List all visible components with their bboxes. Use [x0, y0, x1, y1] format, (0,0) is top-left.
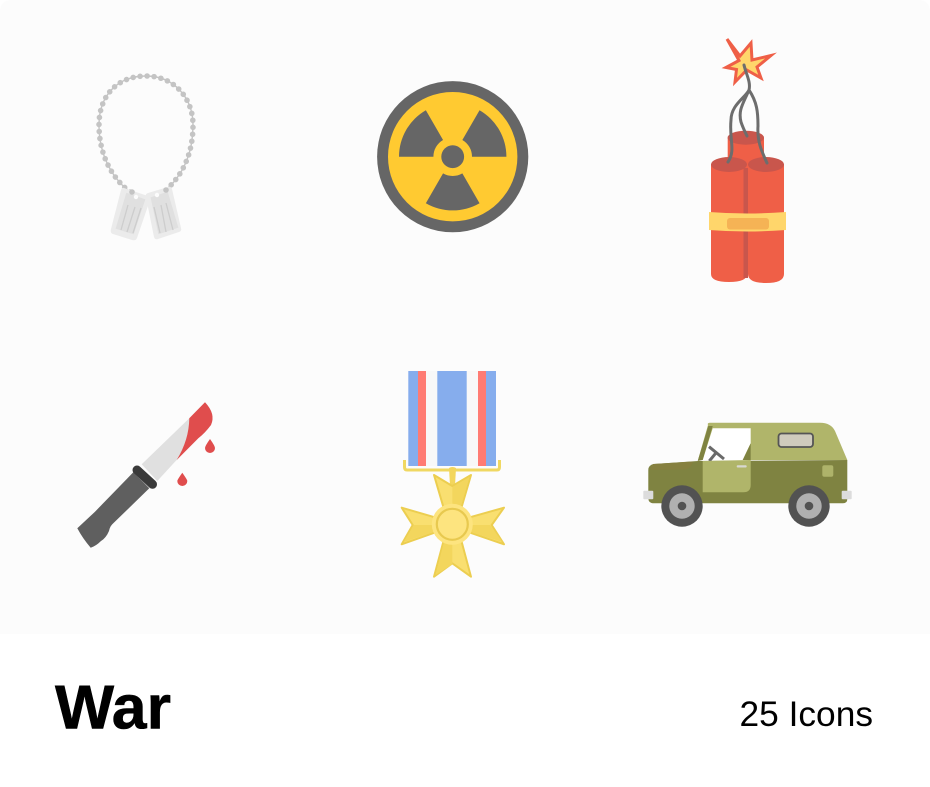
icon: radiation symbol — [377, 81, 528, 232]
icon: military medal — [402, 371, 504, 577]
ribbon — [408, 371, 496, 466]
icon: bloody knife — [77, 402, 215, 548]
fuse wires — [728, 65, 767, 163]
icon: military jeep — [643, 423, 852, 527]
title: War — [55, 673, 171, 742]
wheels — [661, 485, 830, 527]
icon count: 25 Icons — [740, 695, 873, 734]
icon: dynamite — [709, 39, 786, 283]
blood drops — [177, 439, 215, 486]
icon: dog tags — [99, 76, 193, 240]
door — [703, 460, 751, 492]
spark — [726, 39, 771, 82]
cross — [402, 475, 504, 577]
